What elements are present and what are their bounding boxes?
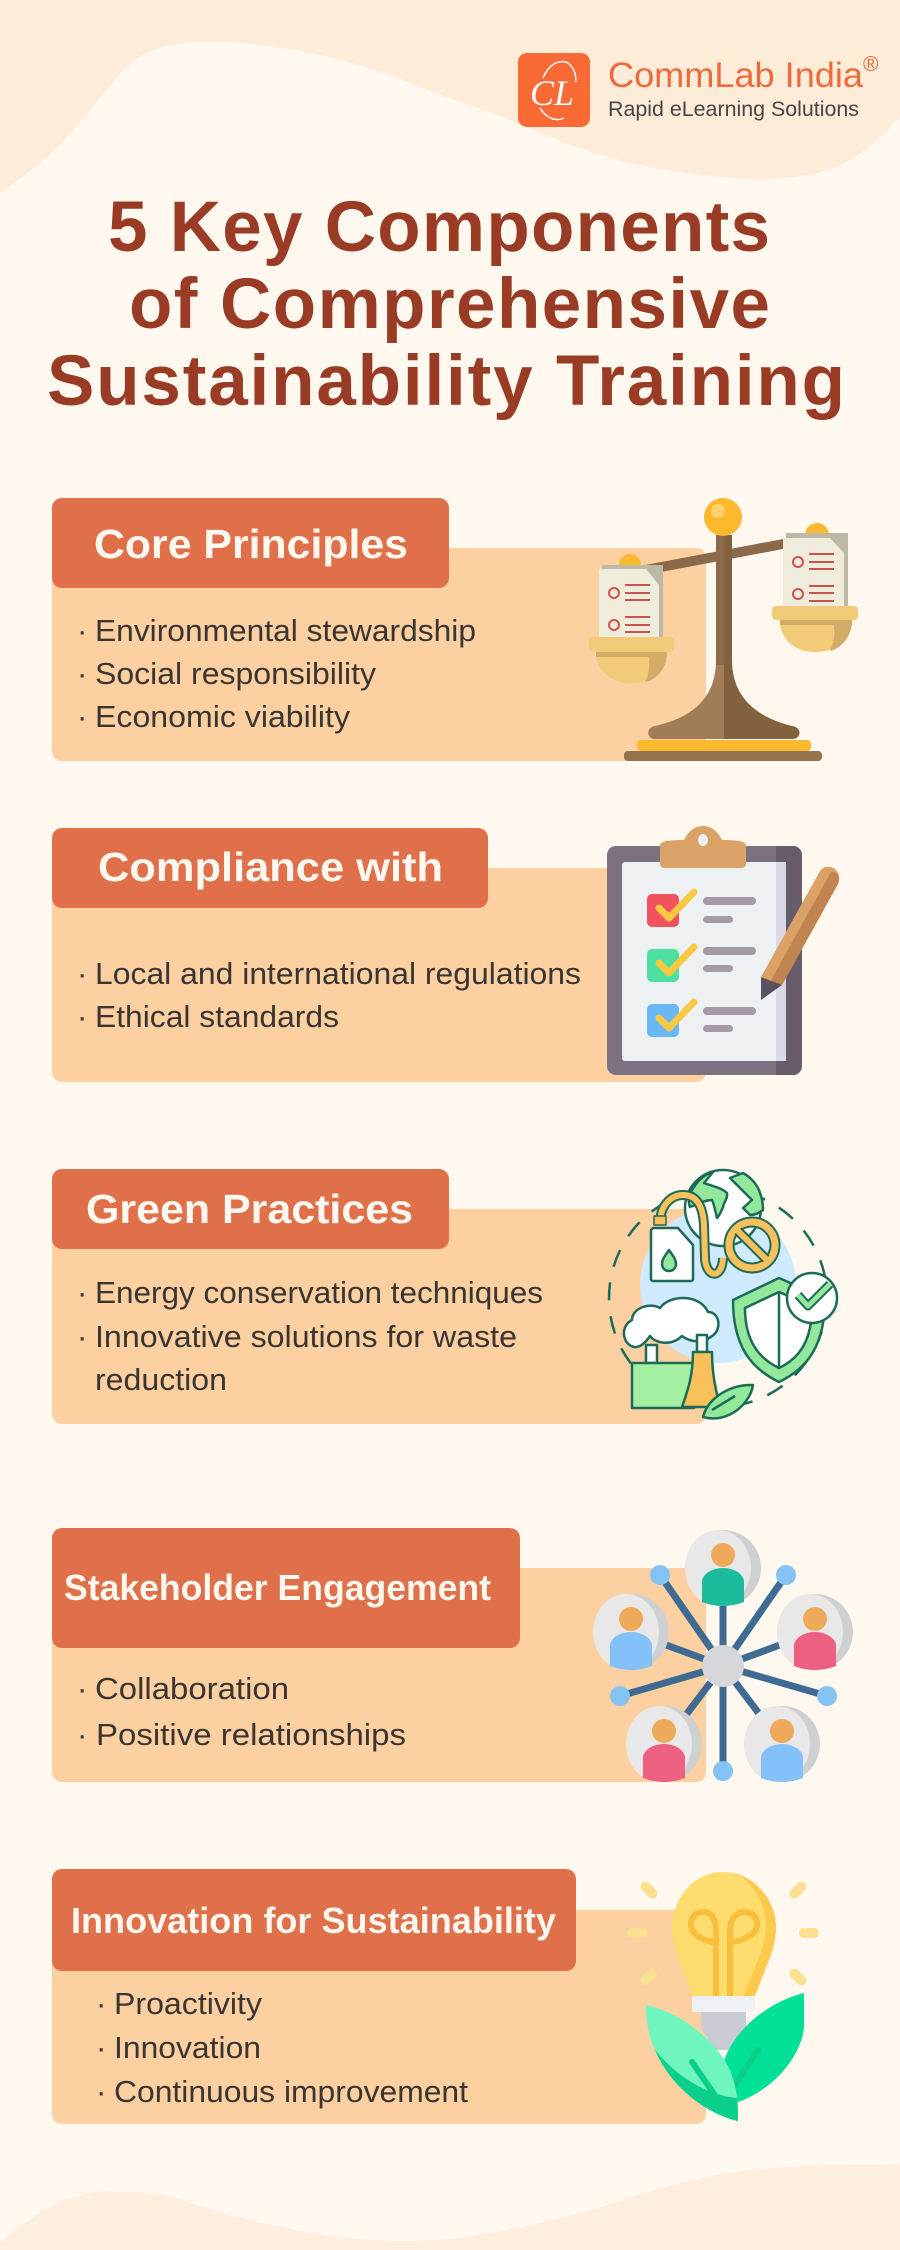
panel: green practices [52, 1169, 837, 1424]
bullet list: · [96, 2030, 106, 2065]
bullet list: · [96, 2074, 106, 2109]
bulb glass [672, 1872, 776, 1996]
panel: stakeholder engagement [52, 1528, 853, 1782]
heading [52, 828, 488, 908]
bullet list [77, 956, 581, 1034]
bullet list: Social responsibility [95, 656, 377, 691]
person: lower right [744, 1706, 820, 1782]
filament [691, 1912, 757, 1996]
connector nodes [610, 1565, 837, 1781]
heading [52, 1169, 449, 1249]
person: lower left [626, 1706, 702, 1782]
checklist row 1 [647, 892, 756, 927]
heading: Stakeholder Engagement [64, 1567, 491, 1608]
bullet list: Continuous improvement [114, 2074, 468, 2109]
panel: innovation for sustainability [52, 1869, 819, 2124]
checklist row 3 [647, 1002, 756, 1037]
right pan [772, 606, 858, 652]
card [52, 548, 706, 761]
heading: Core Principles [94, 521, 408, 567]
bullet list: · [77, 699, 87, 734]
bullet list: · [77, 1319, 87, 1354]
bullet list: Collaboration [95, 1671, 289, 1706]
bullet list [77, 1275, 543, 1397]
bullet list: · [77, 956, 87, 991]
fuel can [651, 1228, 693, 1281]
bullet list: · [77, 1275, 87, 1310]
bulb base [701, 2010, 746, 2050]
person: right [777, 1594, 853, 1670]
bullet list [96, 1986, 468, 2109]
shield [733, 1278, 825, 1382]
card [52, 868, 706, 1082]
icon: light bulb with leaves [627, 1872, 819, 2121]
panel: core principles [52, 498, 858, 761]
bullet list: · [77, 613, 87, 648]
hub [702, 1645, 744, 1687]
title: 5 Key Components [108, 188, 770, 267]
logo tagline: Rapid eLearning Solutions [608, 97, 859, 121]
registered mark: ® [863, 53, 879, 76]
top background wave [0, 0, 900, 193]
light rays [627, 1879, 819, 1988]
icon: clipboard checklist [607, 826, 839, 1075]
title [47, 188, 845, 421]
bullet list: Positive relationships [96, 1717, 406, 1752]
card [52, 1910, 706, 2124]
heading [52, 1869, 576, 1971]
bottom background wave [0, 2165, 900, 2250]
prohibition sign [729, 1222, 775, 1268]
bullet list: · [96, 1986, 106, 2021]
hose [654, 1195, 723, 1274]
bullet list: · [77, 999, 87, 1034]
leaf [703, 1385, 753, 1418]
checklist row 2 [647, 947, 756, 982]
right leaf [722, 1993, 804, 2103]
left document [599, 565, 663, 637]
icon: balance scale [589, 498, 858, 761]
logo name: CommLab India [608, 56, 864, 95]
left leaf [646, 2005, 738, 2121]
pencil [761, 867, 839, 1000]
icon: green practices cluster [609, 1170, 837, 1418]
bullet list: · [77, 1671, 87, 1706]
spokes [620, 1568, 827, 1771]
heading: Green Practices [86, 1186, 413, 1232]
card [52, 1568, 706, 1782]
bullet list: Energy conservation techniques [95, 1275, 543, 1310]
bullet list: Innovation [114, 2030, 261, 2065]
clip [660, 826, 746, 868]
icon: stakeholder network [593, 1530, 853, 1782]
heading: Innovation for Sustainability [71, 1900, 556, 1941]
chimneys [646, 1335, 707, 1363]
logo [518, 53, 879, 127]
person: top [685, 1530, 761, 1606]
bullet list: Proactivity [114, 1986, 263, 2021]
heading [52, 1528, 520, 1648]
check badge [787, 1273, 837, 1323]
card [52, 1209, 706, 1424]
bullet list: Economic viability [95, 699, 351, 734]
heading: Compliance with [98, 844, 443, 890]
smoke cloud [624, 1298, 718, 1347]
bullet list: Innovative solutions for waste [95, 1319, 517, 1354]
bullet list: · [77, 656, 87, 691]
bullet list: · [77, 1717, 87, 1752]
bullet list: Local and international regulations [95, 956, 581, 991]
factory [632, 1363, 694, 1408]
left pan [589, 637, 674, 683]
right document [783, 533, 848, 606]
bullet list: Ethical standards [95, 999, 339, 1034]
person: left [593, 1594, 669, 1670]
heading [52, 498, 449, 588]
cooling tower [682, 1352, 720, 1407]
bullet list [77, 613, 476, 734]
bullet list: reduction [95, 1362, 227, 1397]
title: of Comprehensive [129, 265, 770, 344]
logo mark [518, 53, 590, 127]
logo mark: CL [530, 73, 574, 113]
title: Sustainability Training [47, 342, 845, 421]
bullet list [77, 1671, 406, 1752]
globe [685, 1170, 763, 1246]
panel: compliance with [52, 826, 839, 1082]
bullet list: Environmental stewardship [95, 613, 476, 648]
